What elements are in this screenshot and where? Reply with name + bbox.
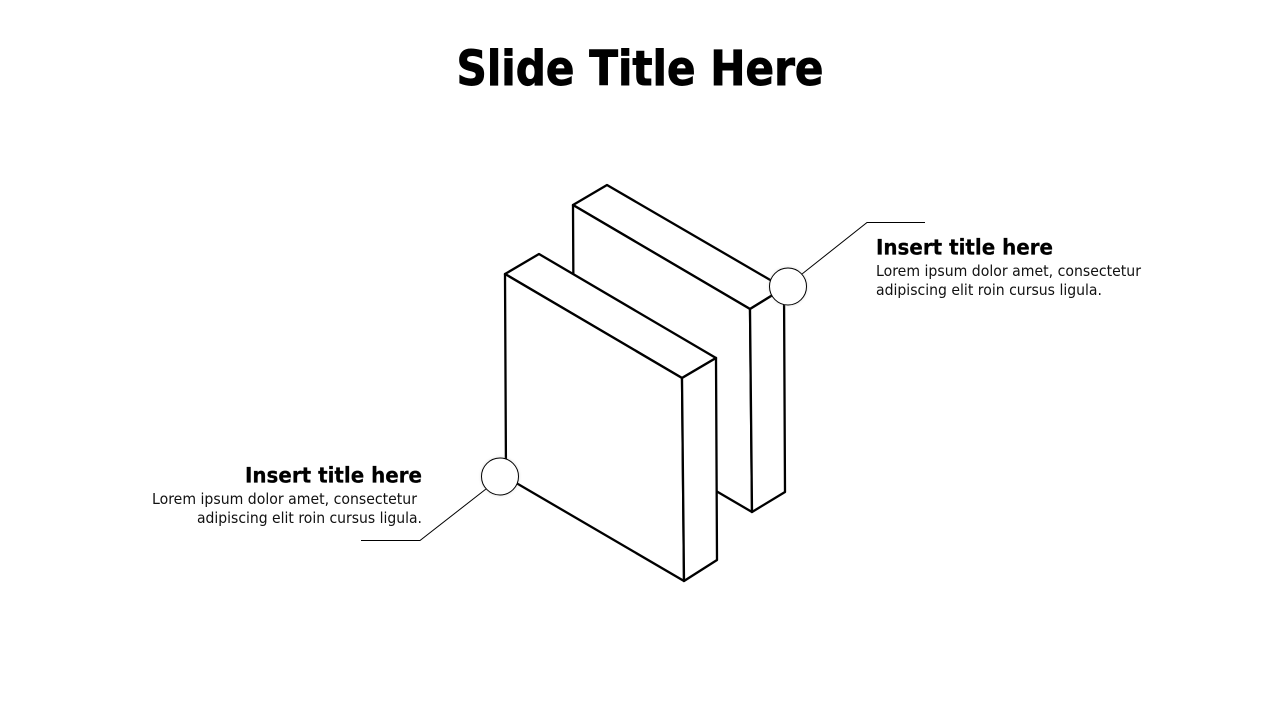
body text: top right: adipiscing elit roin cursus ligula.	[876, 281, 1102, 299]
body text: top right	[876, 262, 1142, 299]
marker circle: top right	[770, 268, 806, 305]
heading: bottom left: Insert title here	[245, 464, 422, 488]
callout: bottom left	[152, 458, 518, 540]
heading: top right: Insert title here	[876, 236, 1053, 260]
leader line: top right	[802, 222, 925, 274]
body text: bottom left	[152, 490, 422, 527]
title: Slide Title Here	[456, 41, 824, 97]
back isometric slab	[573, 185, 785, 512]
leader line: bottom left	[361, 489, 486, 540]
marker circle: bottom left	[482, 458, 518, 495]
callout: top right	[770, 222, 1142, 305]
body text: bottom left: adipiscing elit roin cursus ligula.	[197, 509, 422, 527]
body text: top right: Lorem ipsum dolor amet, consectetur	[876, 262, 1142, 280]
front isometric slab	[505, 254, 717, 581]
body text: bottom left: Lorem ipsum dolor amet, consectetur	[152, 490, 418, 508]
